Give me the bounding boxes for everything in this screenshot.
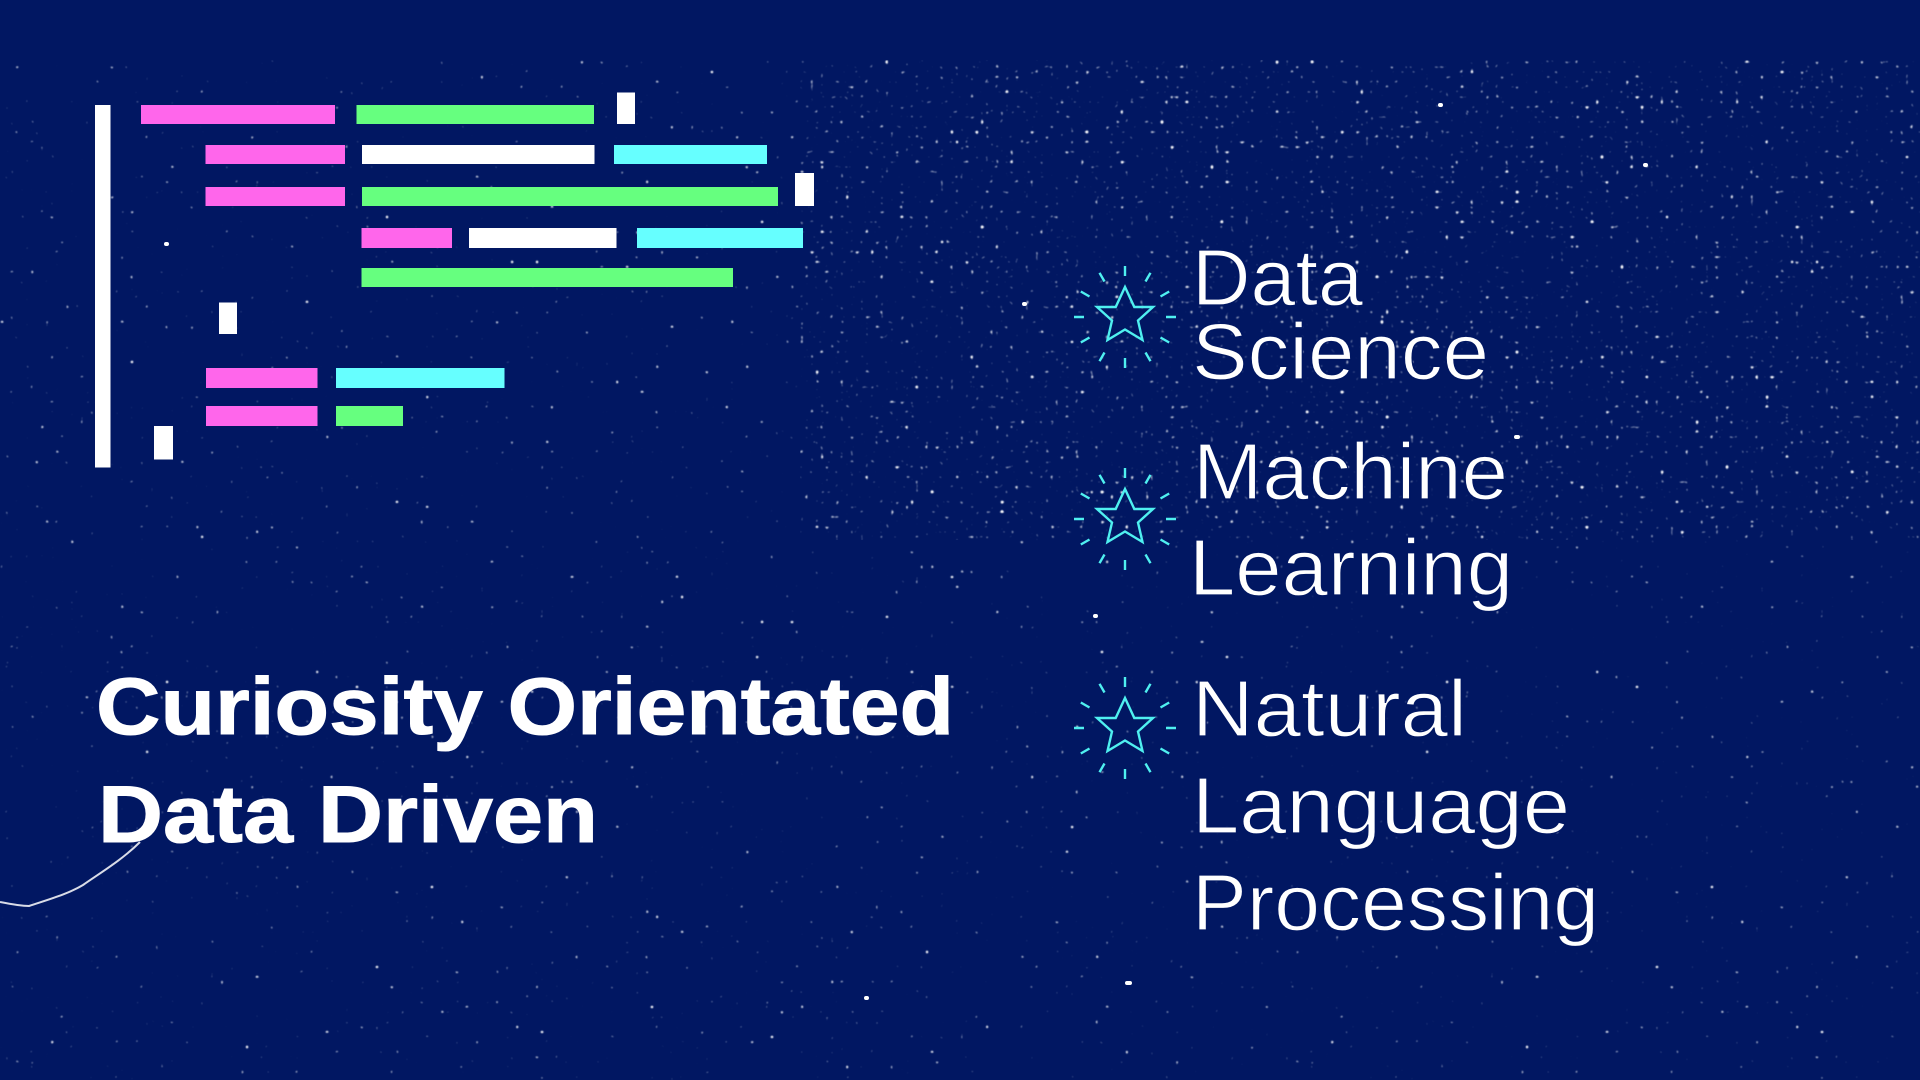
code row 4 bbox=[362, 228, 803, 248]
code row 6 bbox=[206, 368, 504, 388]
icon: star bbox=[1074, 266, 1176, 368]
icon: star bbox=[1074, 677, 1176, 779]
list item: machine learning bbox=[1074, 427, 1513, 612]
label: machine learning bbox=[1189, 427, 1513, 612]
shooting star curve bbox=[0, 842, 140, 906]
cursor bbox=[154, 426, 173, 460]
code margin line bbox=[95, 105, 110, 468]
code row 2 bbox=[206, 145, 767, 164]
code row 7 bbox=[206, 406, 403, 426]
label: data science: Data bbox=[1192, 233, 1364, 322]
label: machine learning: Machine bbox=[1193, 427, 1508, 516]
label: natural language processing: Natural bbox=[1192, 664, 1467, 753]
label: natural language processing bbox=[1192, 664, 1599, 947]
label: natural language processing: Processing bbox=[1192, 858, 1599, 947]
heading: Curiosity Orientated bbox=[96, 662, 954, 752]
code row 5 bbox=[362, 268, 733, 287]
label: machine learning: Learning bbox=[1189, 523, 1513, 612]
heading bbox=[96, 662, 954, 860]
label: data science: Science bbox=[1192, 307, 1489, 396]
list item: natural language processing bbox=[1074, 664, 1599, 947]
list item: data science bbox=[1074, 233, 1489, 396]
heading: Data Driven bbox=[98, 770, 598, 860]
cursor bbox=[219, 302, 237, 334]
code illustration bbox=[95, 92, 814, 468]
code row 1 bbox=[141, 92, 635, 124]
icon: star bbox=[1074, 468, 1176, 570]
code row 3 bbox=[206, 173, 814, 206]
label: natural language processing: Language bbox=[1192, 761, 1570, 850]
label: data science bbox=[1192, 233, 1489, 396]
